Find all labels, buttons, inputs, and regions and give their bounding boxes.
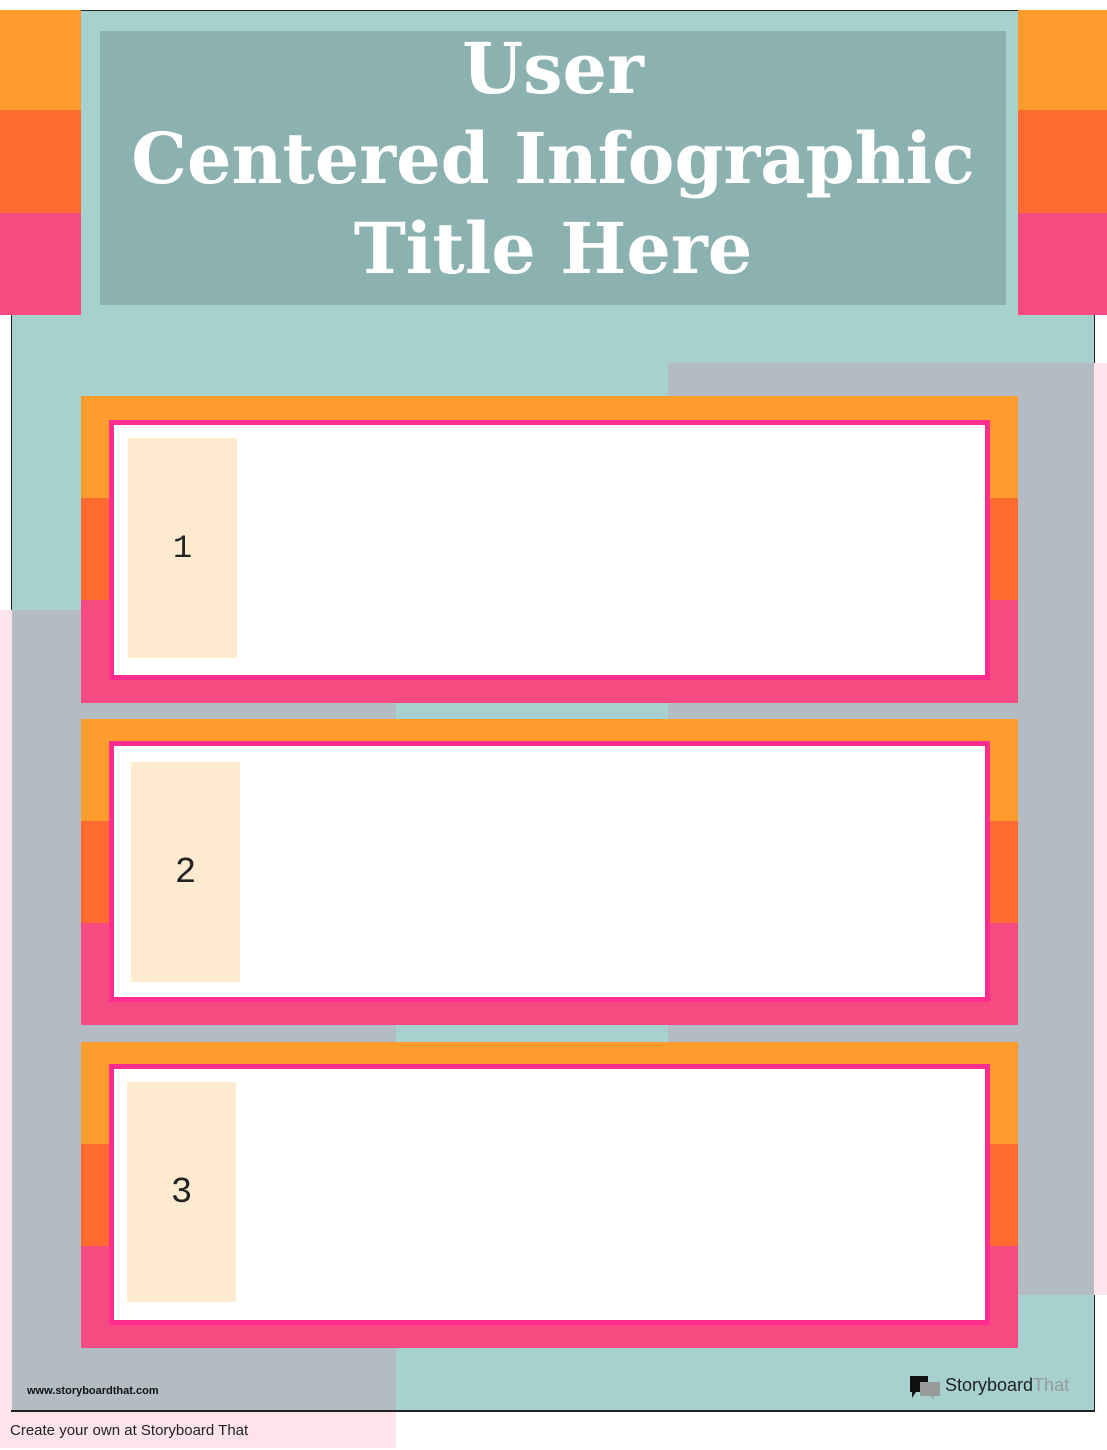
number box 2: 2 (175, 852, 196, 892)
right corner stripes (1018, 10, 1107, 315)
logo (910, 1375, 1069, 1400)
panel: 3 (81, 1042, 1018, 1348)
decorative pink/gray block left (0, 610, 396, 1448)
footer url: www.storyboardthat.com (27, 1385, 159, 1397)
number box 2 (131, 762, 240, 982)
title: Title Here (354, 207, 752, 290)
panel: 1 (81, 396, 1018, 703)
decorative gray block right (668, 363, 1094, 1295)
number box 1: 1 (173, 530, 192, 566)
number box 3 (127, 1082, 236, 1302)
footer caption: Create your own at Storyboard That (10, 1422, 248, 1439)
title (100, 31, 1006, 305)
left corner stripes (0, 10, 81, 315)
title: Centered Infographic (131, 117, 975, 200)
logo: StoryboardThat (945, 1375, 1069, 1395)
icon: speech bubbles (910, 1376, 940, 1400)
number box 3: 3 (171, 1172, 192, 1212)
panel: 2 (81, 719, 1018, 1025)
number box 1 (128, 438, 237, 658)
